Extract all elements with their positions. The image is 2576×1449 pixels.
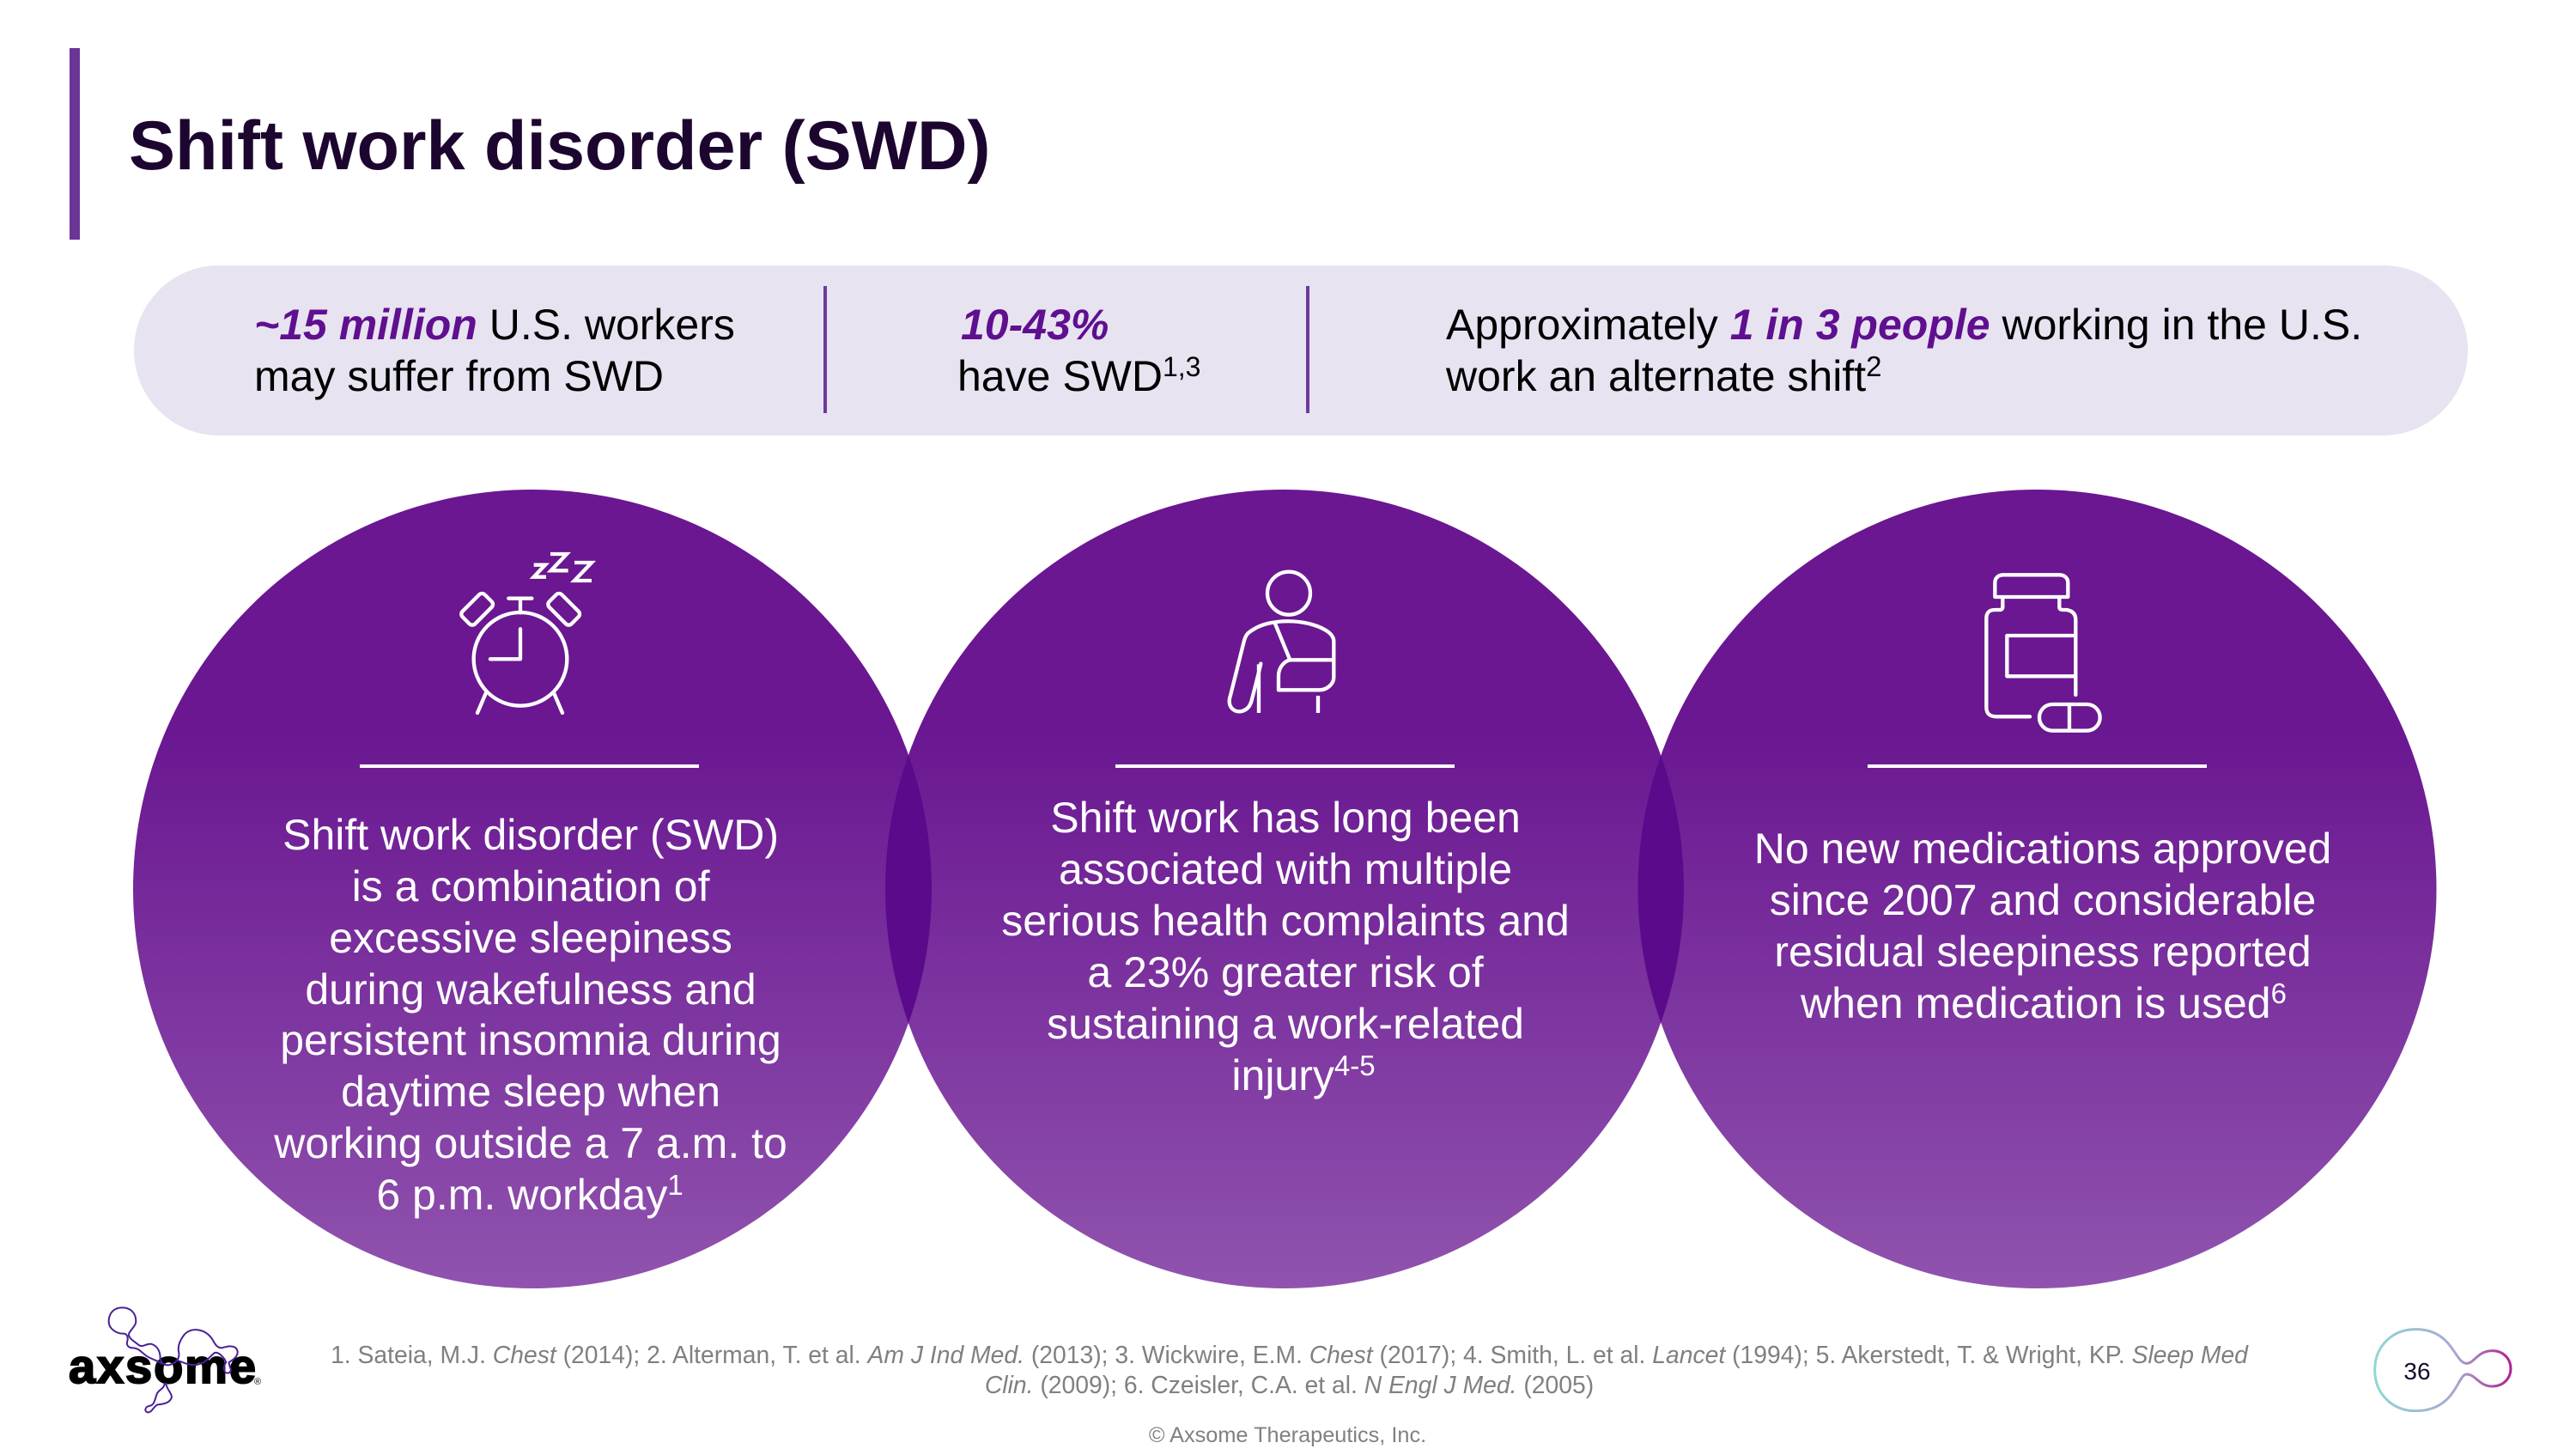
title accent bar — [70, 48, 80, 240]
statistic: 10-43 percent: have SWD — [957, 352, 1163, 400]
text: circle 2: Shift work has long been — [1050, 794, 1521, 842]
text: circle 1: persistent insomnia during — [280, 1016, 781, 1064]
circle 1 background — [133, 490, 932, 1288]
text: circle 2: 4-5 — [1334, 1050, 1376, 1081]
statistic: 15 million workers: ~15 million U.S. workers — [254, 301, 735, 349]
text: circle 3: 6 — [2271, 977, 2287, 1009]
page number badge — [2375, 1330, 2511, 1411]
statistic: 15 million workers: may suffer from SWD — [254, 352, 664, 400]
text: circle 1: is a combination of — [352, 862, 710, 910]
text: circle 1: excessive sleepiness — [329, 914, 732, 962]
panel: statistics band — [134, 265, 2468, 435]
text: circle 3: when medication is used — [1800, 977, 2287, 1027]
copyright: © Axsome Therapeutics, Inc. — [1149, 1423, 1426, 1447]
text: circle 1: daytime sleep when — [341, 1068, 720, 1116]
panel: circle 3 medications — [1638, 490, 2437, 1288]
page number: 36 — [2403, 1358, 2431, 1385]
statistic: 1 in 3 people: Approximately 1 in 3 people working in the U.S. — [1446, 301, 2362, 349]
panel: circle 1 definition — [133, 490, 932, 1288]
badge outline — [2375, 1330, 2511, 1411]
panel: circle 2 health risk — [885, 490, 1684, 1288]
text: circle 1: 6 p.m. workday — [376, 1169, 683, 1219]
logo registered mark: ® — [254, 1377, 261, 1387]
reference line 2: Clin. (2009); 6. Czeisler, C.A. et al. N Engl J Med. (2005) — [985, 1371, 1594, 1398]
logo wordmark: axsome — [69, 1339, 256, 1393]
logo squiggle — [109, 1307, 238, 1412]
references — [331, 1341, 2249, 1398]
band background — [134, 265, 2468, 435]
text: circle 1: Shift work disorder (SWD) — [283, 811, 779, 859]
text: circle 2: injury — [1231, 1050, 1376, 1099]
reference line 1: 1. Sateia, M.J. Chest (2014); 2. Alterman, T. et al. Am J Ind Med. (2013); 3. Wickwire, E.M. Chest (2017); 4. Smith, L. et al. Lancet (1994); 5. Akerstedt, T. & Wright, KP. Sleep Med — [331, 1341, 2249, 1368]
statistic: 10-43 percent: 10-43% — [961, 301, 1109, 349]
statistic: 1 in 3 people: 2 — [1866, 350, 1882, 382]
circle 2 background — [885, 490, 1684, 1288]
text: circle 2: associated with multiple — [1059, 845, 1512, 893]
text: circle 1: during wakefulness and — [305, 965, 756, 1014]
statistic: 10-43 percent: 1,3 — [1163, 351, 1200, 382]
text: circle 2: a 23% greater risk of — [1087, 948, 1484, 996]
statistic: 1 in 3 people: work an alternate shift — [1445, 352, 1866, 400]
icon: alarm clock with zzz — [459, 554, 592, 713]
icon: medicine bottle and capsule — [1986, 575, 2100, 731]
text: circle 2: sustaining a work-related — [1047, 1000, 1524, 1048]
text: circle 2: serious health complaints and — [1001, 897, 1570, 945]
text: circle 3: No new medications approved — [1754, 825, 2331, 873]
text: circle 1: 1 — [667, 1169, 683, 1201]
circle overlap right — [1638, 756, 1684, 1023]
divider lines — [360, 764, 2207, 768]
logo: axsome — [69, 1307, 261, 1412]
circle 3 background — [1638, 490, 2437, 1288]
circle overlap left — [885, 756, 932, 1023]
text: circle 3: since 2007 and considerable — [1770, 876, 2316, 924]
icon: person with arm sling — [1230, 572, 1334, 713]
text: circle 3: residual sleepiness reported — [1774, 928, 2312, 976]
title: Shift work disorder (SWD) — [129, 107, 991, 185]
text: circle 1: working outside a 7 a.m. to — [273, 1119, 787, 1167]
